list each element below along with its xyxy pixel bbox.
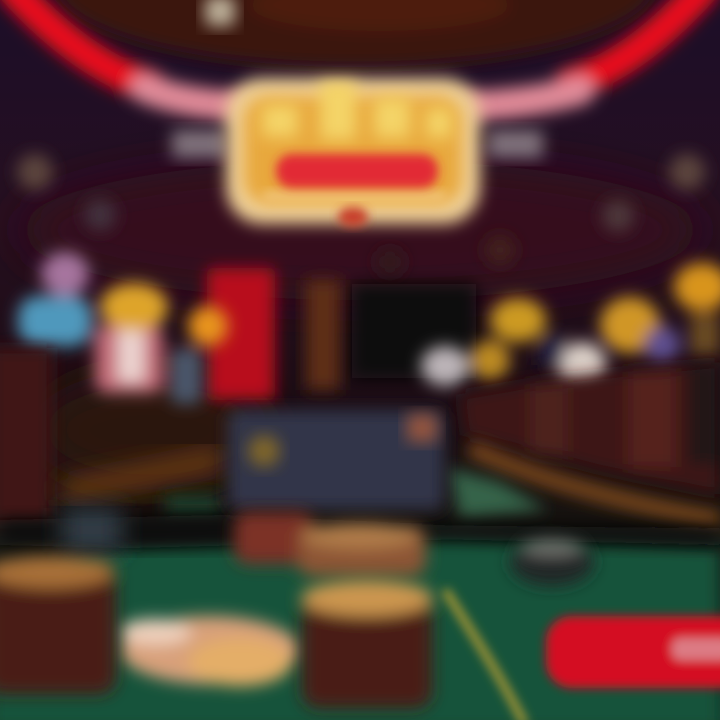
back wall glow [20, 160, 700, 490]
dark chip stack [510, 538, 594, 586]
slate card panel [228, 410, 444, 510]
left counter edge [62, 458, 222, 492]
left cabinet [0, 348, 52, 523]
sign bottom band [262, 190, 447, 204]
left figures [18, 252, 228, 404]
wood cylinder centre [301, 580, 433, 708]
right bar counter [460, 362, 720, 495]
red curtain panel [207, 268, 275, 400]
wood cylinder left [0, 556, 116, 694]
ceiling dome [55, 0, 655, 67]
ceiling light [205, 0, 235, 26]
back dark wall panel [352, 284, 476, 378]
card chip orange [407, 414, 437, 442]
table gold line [445, 590, 525, 720]
sign face [244, 96, 462, 204]
cream plate [119, 616, 300, 686]
green felt table [0, 468, 720, 720]
red arc [14, 0, 702, 106]
right figures [421, 263, 720, 390]
sign glow [226, 78, 480, 224]
red sign pill [276, 154, 438, 188]
red table pill [546, 616, 720, 688]
sign bulbs [262, 82, 452, 140]
grey stool left [62, 508, 122, 552]
dark table rail [0, 515, 720, 548]
brown column [306, 280, 340, 390]
marquee sign [226, 78, 480, 227]
card chip gold [248, 435, 280, 467]
wood stack middle [234, 512, 426, 576]
wall stars [17, 154, 705, 275]
right counter edge [470, 448, 720, 520]
side lights under arc [172, 130, 543, 158]
red sign tip [338, 207, 368, 227]
